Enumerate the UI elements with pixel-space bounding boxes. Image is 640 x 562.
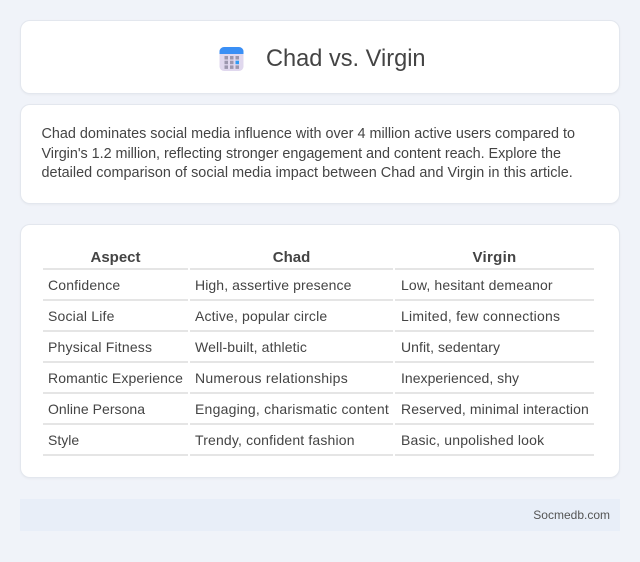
table header: Virgin [472, 249, 517, 266]
table: comparison: Physical Fitness [48, 339, 152, 355]
table: comparison: Low, hesitant demeanor [401, 277, 553, 293]
table: comparison: Style [48, 432, 79, 448]
table: comparison: Romantic Experience [48, 370, 183, 386]
table: comparison: Confidence [48, 277, 120, 293]
table header: Chad [273, 249, 310, 266]
table: comparison: Inexperienced, shy [401, 370, 519, 386]
table: comparison: Basic, unpolished look [401, 432, 544, 448]
table header: Aspect [90, 249, 141, 266]
title: Chad vs. Virgin [266, 46, 426, 72]
panel: summary text [20, 104, 620, 204]
table: comparison: Social Life [48, 308, 115, 324]
table: comparison: Online Persona [48, 401, 145, 417]
footer bar [20, 499, 620, 531]
panel: title card [20, 20, 620, 94]
table header [90, 249, 517, 266]
panel: comparison table [20, 224, 620, 478]
table: comparison: Reserved, minimal interaction [401, 401, 589, 417]
table: comparison: Engaging, charismatic content [195, 401, 389, 417]
footer credit: Socmedb.com [533, 508, 610, 522]
table: comparison: Limited, few connections [401, 308, 560, 324]
text block: summary: detailed comparison of social media impact between Chad and Virgin in this article. [42, 165, 573, 181]
table: comparison: Trendy, confident fashion [195, 432, 355, 448]
table: comparison: High, assertive presence [195, 277, 351, 293]
text block: summary: Chad dominates social media influence with over 4 million active users compared to [42, 126, 575, 142]
text block: summary: Virgin's 1.2 million, reflecting stronger engagement and content reach. Explore the [42, 146, 561, 162]
icon: calendar [220, 47, 244, 71]
table: comparison: Active, popular circle [195, 308, 327, 324]
table: comparison: Well-built, athletic [195, 339, 307, 355]
table: comparison: Numerous relationships [195, 370, 348, 386]
table: comparison: Unfit, sedentary [401, 339, 500, 355]
text block: summary [42, 126, 575, 181]
